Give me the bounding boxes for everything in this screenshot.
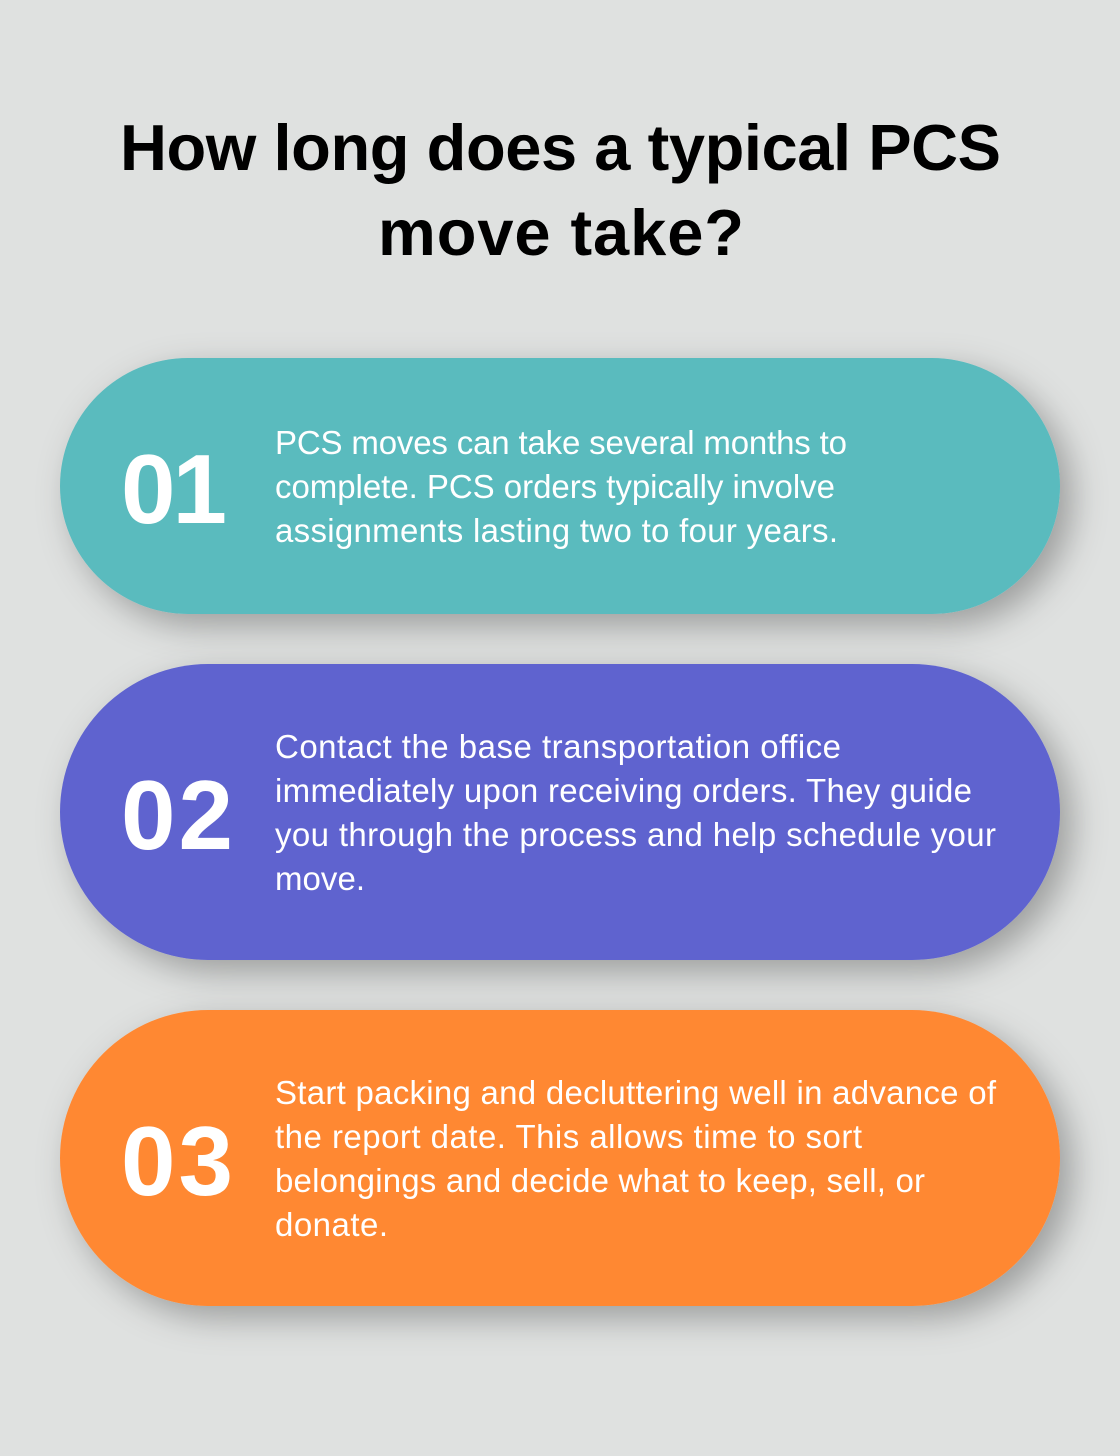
text block: step 01: PCS moves can take several months to [275,424,847,461]
text block: step 02: Contact the base transportation office [275,728,841,765]
pill background: step 02 [60,664,1060,960]
text block: step 03: Start packing and decluttering well in advance of [275,1074,997,1111]
text block: step 02: you through the process and help schedule your [275,816,996,853]
title: How long does a typical PCS [120,111,1001,184]
text block: step 02 [275,728,996,897]
text block: step 03: donate. [275,1206,388,1243]
text block: step 03 [275,1074,997,1243]
text block: step 01: assignments lasting two to four years. [275,512,838,549]
text block: step 01: complete. PCS orders typically involve [275,468,835,505]
title: move take? [378,196,744,269]
text block: step 01 [275,424,847,549]
text block: step 03: the report date. This allows time to sort [275,1118,862,1155]
number: 01: 01 [121,434,227,544]
panel: step 02 [60,664,1060,960]
panel: step 03 [60,1010,1060,1306]
number: 02: 02 [121,760,233,870]
pill background: step 01 [60,358,1060,614]
text block: step 03: belongings and decide what to keep, sell, or [275,1162,925,1199]
title [120,111,1001,269]
text block: step 02: move. [275,860,365,897]
pill background: step 03 [60,1010,1060,1306]
text block: step 02: immediately upon receiving orders. They guide [275,772,972,809]
panel: step 01 [60,358,1060,614]
number: 03: 03 [121,1106,233,1216]
